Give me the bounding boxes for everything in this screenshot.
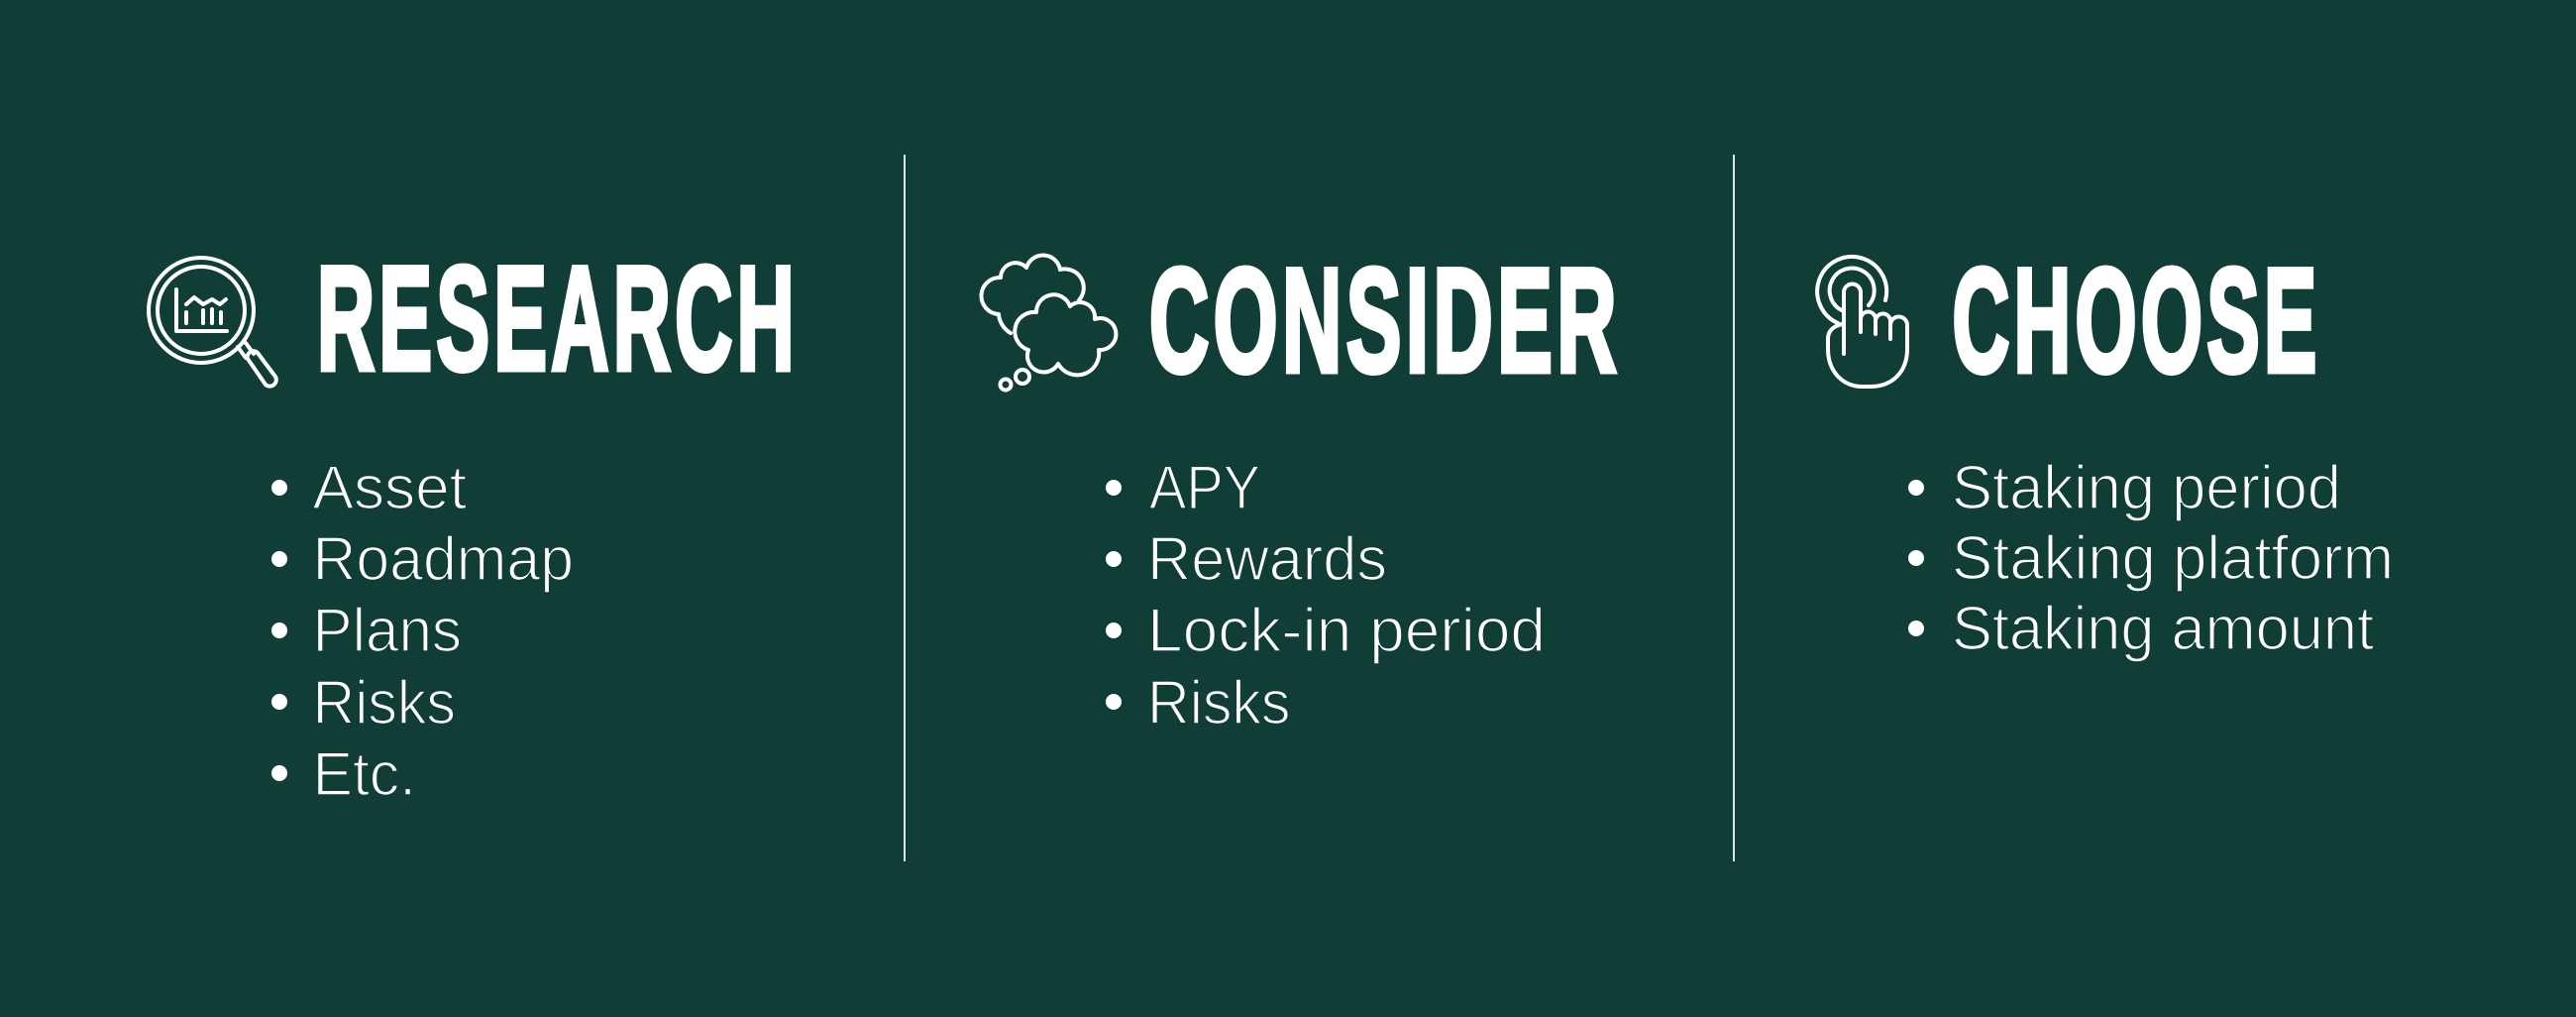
list: research items: Roadmap [313, 525, 574, 594]
list: consider items: Rewards [1147, 525, 1387, 594]
list: research items: Risks [313, 669, 456, 737]
list: choose items: Staking period [1952, 454, 2341, 522]
list: choose items: Staking platform [1952, 524, 2394, 593]
list: choose items [1908, 454, 2394, 663]
heading: consider: CONSIDER [1149, 238, 1621, 402]
list: research items [271, 454, 574, 809]
panel: choose [1817, 238, 2394, 663]
list: consider items: Lock-in period [1147, 597, 1546, 665]
panel: research [149, 236, 799, 809]
icon: hand tapping [1817, 257, 1907, 387]
list: consider items: APY [1149, 454, 1260, 522]
list: consider items [1106, 454, 1546, 737]
heading: research: RESEARCH [317, 236, 799, 400]
icon: magnifier with chart [149, 258, 276, 387]
icon: thought clouds [981, 256, 1116, 391]
list: choose items: Staking amount [1952, 595, 2374, 663]
list: consider items: Risks [1147, 669, 1290, 737]
list: research items: Plans [313, 597, 462, 665]
list: research items: Asset [313, 454, 467, 522]
list: research items: Etc. [313, 740, 416, 809]
panel: consider [981, 238, 1621, 737]
